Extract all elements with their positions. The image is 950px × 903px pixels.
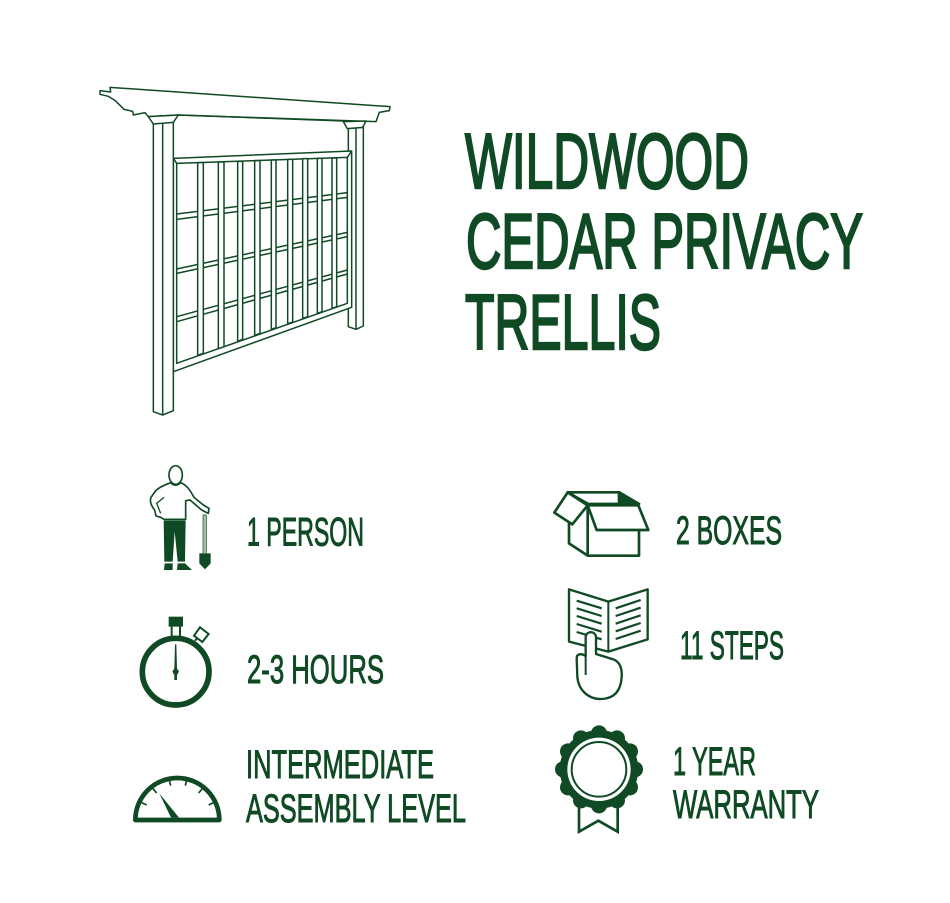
label: intermediate assembly level: INTERMEDIATE xyxy=(246,743,434,787)
title: WILDWOOD xyxy=(465,117,749,205)
label: 1 person: 1 PERSON xyxy=(247,510,364,554)
label: 2 boxes: 2 BOXES xyxy=(676,509,782,553)
illustration: cedar privacy trellis xyxy=(100,87,390,415)
icon: book with pointing hand xyxy=(569,589,648,699)
icon: stopwatch xyxy=(142,617,209,705)
label: 1 year warranty: 1 YEAR xyxy=(673,740,756,784)
icon: open box xyxy=(554,492,648,556)
label: 2-3 hours: 2-3 HOURS xyxy=(247,648,384,692)
icon: person with shovel xyxy=(150,466,211,570)
icon: warranty badge xyxy=(555,725,643,832)
title xyxy=(465,117,863,366)
label: intermediate assembly level: ASSEMBLY LEVEL xyxy=(246,787,466,831)
title: TRELLIS xyxy=(465,278,661,366)
label: 1 year warranty xyxy=(673,740,819,827)
label: intermediate assembly level xyxy=(246,743,466,831)
label: 11 steps: 11 STEPS xyxy=(680,624,784,668)
label: 1 year warranty: WARRANTY xyxy=(673,783,819,827)
icon: assembly level gauge xyxy=(135,778,219,820)
